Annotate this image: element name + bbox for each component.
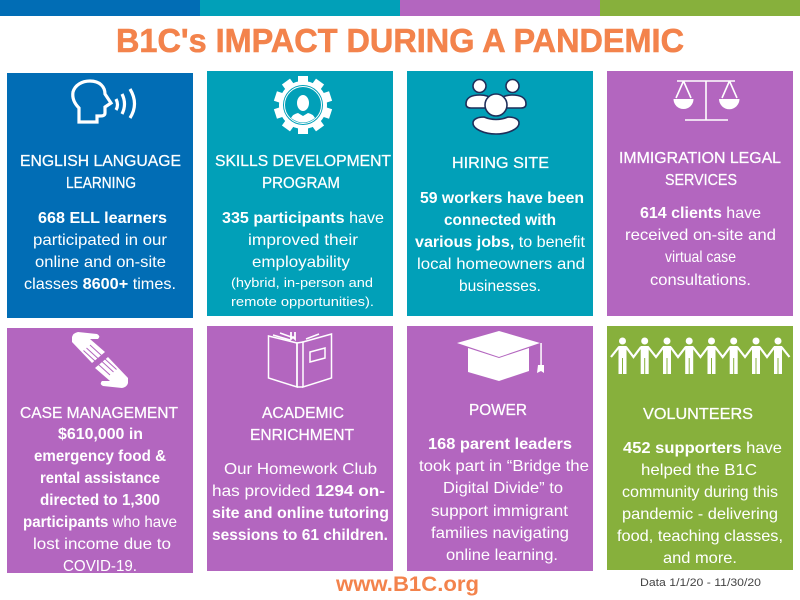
panel: Case management <box>7 328 193 575</box>
text block: community during this <box>622 484 778 501</box>
text block: support immigrant <box>431 503 569 520</box>
panel: Skills development program <box>207 71 393 316</box>
text block: 614 clients have <box>640 205 761 222</box>
text block <box>23 426 177 575</box>
heading: VOLUNTEERS <box>643 406 753 423</box>
icon: open book <box>268 332 332 387</box>
icon: helping hands <box>72 332 128 388</box>
icon: gear with person <box>274 76 332 134</box>
panel: Volunteers <box>607 326 793 570</box>
icon: three people <box>466 80 526 134</box>
icon: speaking head <box>73 81 134 122</box>
panel: Hiring site <box>407 71 593 316</box>
heading: PROGRAM <box>262 175 340 192</box>
text block: participated in our <box>33 232 168 249</box>
title: B1C's IMPACT DURING A PANDEMIC <box>116 22 684 59</box>
heading: SERVICES <box>665 172 737 189</box>
panel: Immigration legal services <box>607 71 793 316</box>
text block: rental assistance <box>40 470 160 487</box>
text block: 452 supporters have <box>623 440 782 457</box>
text block: site and online tutoring <box>212 505 389 522</box>
text block <box>222 210 384 309</box>
text block: improved their <box>248 232 359 249</box>
text block: remote opportunities). <box>231 295 374 309</box>
heading <box>250 405 355 444</box>
heading: ACADEMIC <box>262 405 344 422</box>
icon: graduation cap <box>457 331 544 381</box>
text block: connected with <box>444 212 556 229</box>
text block <box>212 461 389 544</box>
text block: consultations. <box>650 272 751 289</box>
data date range note: Data 1/1/20 - 11/30/20 <box>640 577 761 589</box>
text block: employability <box>252 254 350 271</box>
text block: online and on-site <box>35 254 166 271</box>
text block <box>415 190 586 295</box>
heading: ENRICHMENT <box>250 427 355 444</box>
text block: COVID-19. <box>63 558 137 575</box>
text block: participants who have <box>23 514 177 531</box>
text block: received on-site and <box>625 227 776 244</box>
text block: Digital Divide” to <box>443 480 563 497</box>
text block: $610,000 in <box>58 426 143 443</box>
text block <box>419 436 589 564</box>
panel: POWER <box>407 326 593 571</box>
text block: has provided 1294 on- <box>212 483 385 500</box>
top colour band <box>0 0 800 16</box>
heading: SKILLS DEVELOPMENT <box>215 153 392 170</box>
heading: ENGLISH LANGUAGE <box>20 153 181 170</box>
text block: food, teaching classes, <box>617 528 783 545</box>
text block <box>617 440 783 567</box>
icon: chain of people <box>611 338 790 374</box>
text block: took part in “Bridge the <box>419 458 589 475</box>
text block: Our Homework Club <box>224 461 377 478</box>
panel: Academic enrichment <box>207 326 393 571</box>
panel: English language learning <box>7 73 193 318</box>
heading: POWER <box>469 402 527 419</box>
text block: helped the B1C <box>641 462 757 479</box>
heading: LEARNING <box>66 175 136 192</box>
text block: 668 ELL learners <box>38 210 167 227</box>
text block: emergency food & <box>34 448 166 465</box>
text block <box>24 210 176 293</box>
heading: HIRING SITE <box>452 155 549 172</box>
text block: online learning. <box>446 547 558 564</box>
text block: sessions to 61 children. <box>212 527 388 544</box>
text block: virtual case <box>665 249 736 266</box>
text block: classes 8600+ times. <box>24 276 176 293</box>
text block: directed to 1,300 <box>40 492 160 509</box>
heading: CASE MANAGEMENT <box>20 405 179 422</box>
heading <box>619 150 781 189</box>
text block: various jobs, to benefit <box>415 234 586 251</box>
text block: pandemic - delivering <box>622 506 778 523</box>
heading: IMMIGRATION LEGAL <box>619 150 781 167</box>
icon: scales of justice <box>674 81 740 120</box>
text block: lost income due to <box>33 536 171 553</box>
text block: (hybrid, in-person and <box>231 276 373 290</box>
text block: 59 workers have been <box>420 190 584 207</box>
heading <box>215 153 392 192</box>
text block: businesses. <box>459 278 541 295</box>
text block <box>625 205 776 289</box>
heading <box>20 153 181 192</box>
text block: families navigating <box>431 525 569 542</box>
text block: 168 parent leaders <box>428 436 572 453</box>
text block: and more. <box>663 550 737 567</box>
text block: local homeowners and <box>417 256 585 273</box>
text block: 335 participants have <box>222 210 384 227</box>
website link: www.B1C.org <box>335 573 479 596</box>
